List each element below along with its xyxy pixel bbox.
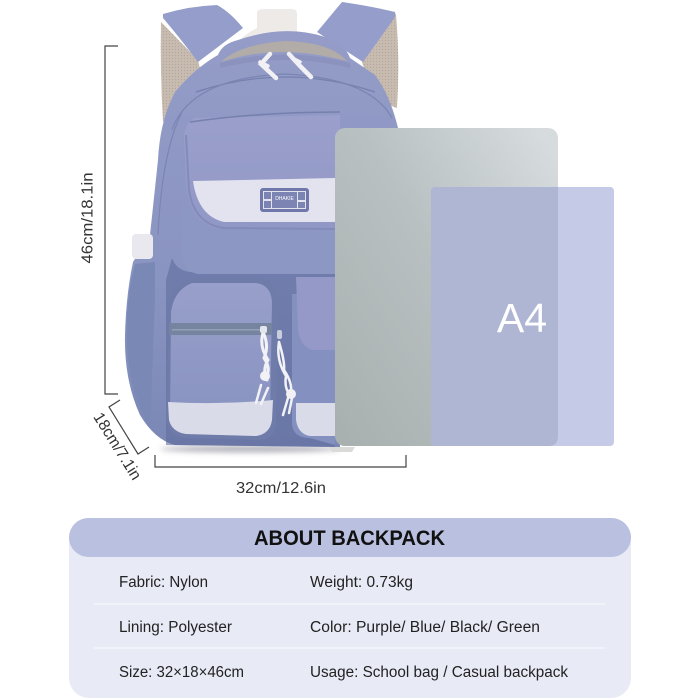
A4 label: A4 (497, 295, 547, 341)
dimension: width: 32cm/12.6in (236, 480, 326, 497)
pocket zipper cords (256, 326, 296, 415)
spec: lining: Lining: Polyester (119, 619, 232, 636)
backpack illustration (125, 2, 398, 452)
panel: about backpack (69, 518, 631, 698)
side bottle holder (132, 234, 153, 259)
header bar (69, 518, 631, 557)
spec: size: Size: 32×18×46cm (119, 664, 244, 681)
left lower pocket (166, 278, 278, 440)
dimension: height (80, 46, 118, 394)
dimension: depth: 18cm/7.1in (89, 410, 144, 483)
heading: ABOUT BACKPACK (254, 527, 445, 550)
A4 sheet (431, 187, 614, 446)
right lower pocket (292, 277, 335, 445)
spec: weight: Weight: 0.73kg (310, 574, 413, 591)
label badge: DHAKIE (275, 196, 294, 202)
label badge (260, 188, 309, 212)
spec: color: Color: Purple/ Blue/ Black/ Green (310, 619, 540, 636)
main zipper pulls (260, 54, 311, 78)
spec: usage: Usage: School bag / Casual backpack (310, 664, 568, 681)
dimension: width (155, 455, 406, 497)
spec: fabric: Fabric: Nylon (119, 574, 208, 591)
dimension: height: 46cm/18.1in (80, 172, 96, 264)
laptop (335, 128, 558, 446)
